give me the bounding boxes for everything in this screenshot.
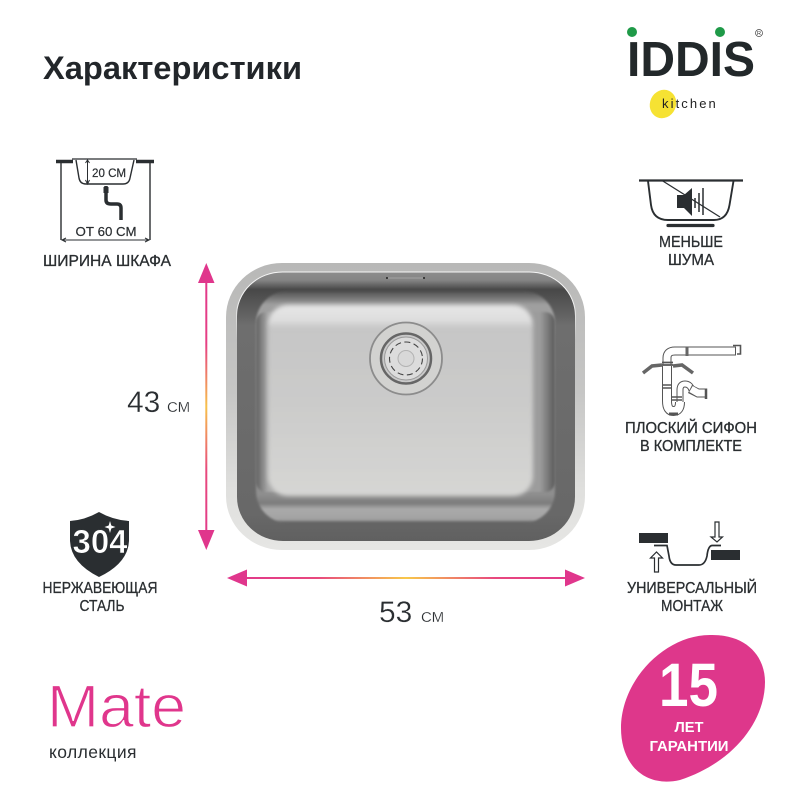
icon: cabinet width — [56, 159, 154, 242]
label: universal mounting: УНИВЕРСАЛЬНЫЙ — [627, 579, 757, 597]
arrow: width — [227, 570, 585, 586]
label: from 60 cm: ОТ 60 СМ — [76, 224, 136, 239]
logo: IDDIS kitchen: IDDIS — [627, 33, 755, 87]
drain — [370, 322, 442, 394]
arrow: height — [198, 263, 214, 550]
warranty badge: ЛЕТ — [674, 719, 704, 736]
dimension: 43 cm: 43 — [127, 386, 160, 419]
label: flat siphon: ПЛОСКИЙ СИФОН — [625, 419, 757, 437]
sink floor — [268, 305, 533, 496]
label: flat siphon line 2: В КОМПЛЕКТЕ — [640, 438, 742, 455]
warranty badge: 15 — [659, 651, 718, 719]
label: universal mounting line 2: МОНТАЖ — [661, 598, 724, 615]
label: less noise: МЕНЬШЕ — [659, 234, 723, 251]
label: stainless steel line 2: СТАЛЬ — [80, 598, 124, 615]
label: cabinet width: ШИРИНА ШКАФА — [43, 253, 172, 270]
dimension: 53 cm: 53 — [379, 596, 412, 629]
logo: IDDIS kitchen: R — [757, 31, 761, 37]
dimension: 53 cm — [379, 596, 444, 629]
warranty badge — [621, 635, 765, 782]
dimension: 43 cm: СМ — [167, 399, 190, 416]
collection name: Mate — [47, 673, 186, 740]
collection label: коллекция — [49, 742, 137, 762]
sink ledge — [256, 291, 555, 523]
dimension: 53 cm: СМ — [421, 609, 444, 626]
icon: less noise — [639, 180, 743, 226]
icon: universal mounting — [639, 522, 740, 572]
warranty badge: ГАРАНТИИ — [650, 738, 728, 755]
overflow slot — [387, 277, 424, 279]
label: 20 cm: 20 СМ — [92, 166, 126, 180]
icon: flat siphon — [643, 346, 740, 414]
icon: 304 steel shield — [70, 512, 129, 577]
title: Характеристики — [43, 50, 302, 86]
label: stainless steel: НЕРЖАВЕЮЩАЯ — [42, 580, 158, 597]
sink rim — [226, 263, 585, 550]
logo: IDDIS kitchen: kitchen — [662, 96, 718, 111]
logo: IDDIS kitchen — [627, 27, 762, 123]
sink bowl — [237, 272, 575, 541]
label: less noise line 2: ШУМА — [668, 252, 715, 269]
sink — [226, 263, 585, 550]
dimension: 43 cm — [127, 386, 190, 419]
icon: 304 steel shield: 304 — [72, 523, 128, 560]
